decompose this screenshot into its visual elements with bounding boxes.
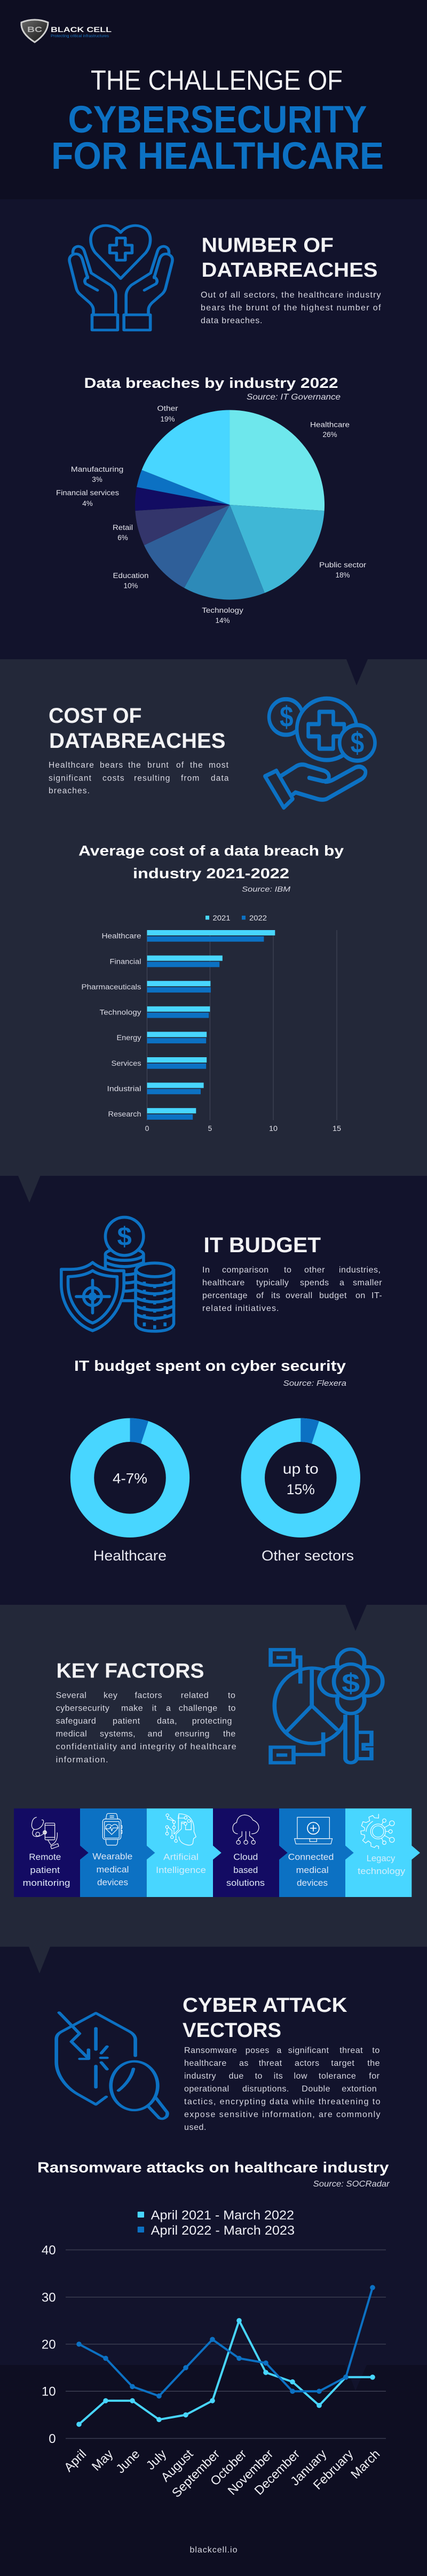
step: wearable medical devices: medical — [96, 1864, 129, 1875]
category labels: Technology — [99, 1009, 141, 1016]
chart title — [84, 375, 341, 402]
category labels: Industrial — [107, 1084, 141, 1093]
axis labels: 15 — [333, 1125, 341, 1133]
logo: Black Cell: BLACK CELL — [51, 25, 112, 34]
icon: shield and coins: $ — [117, 1223, 132, 1252]
legend: April 2021 - March 2022 — [151, 2208, 294, 2222]
chart title: industry 2021-2022 — [133, 865, 289, 881]
legend: 2022 — [249, 914, 267, 922]
text block: information. — [56, 1755, 108, 1765]
title: THE CHALLENGE OF — [91, 65, 343, 96]
heading — [202, 234, 378, 282]
pie labels: Manufacturing — [71, 465, 123, 473]
heading: KEY FACTORS — [57, 1659, 204, 1683]
y axis labels: 30 — [42, 2291, 56, 2305]
category labels: Research — [108, 1110, 141, 1118]
month labels: June — [113, 2447, 143, 2476]
text block: tactics, encrypting data while threatening to — [184, 2097, 381, 2106]
text block: the — [128, 761, 141, 770]
text block: the — [190, 761, 203, 770]
text block: its — [271, 1291, 281, 1300]
heading: COST OF — [49, 704, 142, 728]
pie labels: 3% — [92, 475, 102, 483]
text block: low — [294, 2072, 307, 2081]
text block: due — [229, 2072, 244, 2081]
step: cloud based solutions: solutions — [226, 1878, 265, 1888]
bar chart — [81, 914, 341, 1133]
step: remote patient monitoring: monitoring — [22, 1878, 70, 1888]
month labels: August — [158, 2447, 196, 2484]
process strip: key factors — [14, 1808, 420, 1897]
axis labels: 0 — [145, 1125, 149, 1133]
text block: medical — [56, 1730, 87, 1739]
icon: broken shield with magnifier — [57, 2012, 168, 2119]
text block: data breaches. — [201, 316, 263, 325]
icon: hand holding money and medical cross — [265, 699, 375, 808]
month labels — [61, 2447, 383, 2500]
legend — [205, 914, 267, 922]
step: artificial intelligence: Artificial — [163, 1852, 199, 1862]
text block: budget — [319, 1291, 347, 1300]
month labels: March — [348, 2447, 383, 2481]
text block: spends — [300, 1278, 329, 1287]
month labels: January — [288, 2447, 329, 2488]
step: wearable medical devices — [80, 1808, 155, 1897]
text block: poses — [246, 2046, 270, 2055]
pie labels: 6% — [117, 534, 128, 542]
chart title: Average cost of a data breach by — [78, 843, 344, 859]
panel: cost of data breaches — [0, 659, 427, 1176]
text block: Ransomware — [184, 2046, 237, 2055]
arrow notch — [29, 1947, 50, 1973]
text block: cybersecurity — [56, 1704, 109, 1713]
month labels: September — [169, 2447, 223, 2500]
arrow notch — [345, 2365, 367, 2391]
text block: and — [147, 1730, 163, 1739]
text block: extortion — [342, 2085, 377, 2094]
chart title: Source: Flexera — [283, 1379, 346, 1388]
pie labels: Retail — [113, 524, 133, 532]
y axis labels: 20 — [42, 2338, 56, 2352]
text block: challenge — [179, 1704, 218, 1713]
text block: as — [239, 2059, 249, 2068]
heading: NUMBER OF — [202, 234, 334, 256]
text block: factors — [135, 1691, 162, 1700]
text block — [49, 761, 230, 795]
step: artificial intelligence: Intelligence — [156, 1865, 206, 1875]
heading — [49, 704, 225, 753]
logo: Black Cell — [21, 20, 112, 42]
pie labels: Public sector — [319, 561, 367, 569]
chart title: Data breaches by industry 2022 — [84, 375, 338, 391]
y axis labels: 40 — [42, 2243, 56, 2258]
chart title: Source: IT Governance — [247, 393, 341, 402]
text block: for — [369, 2072, 380, 2081]
logo: Black Cell: BC — [27, 25, 42, 34]
text block: to — [228, 1704, 236, 1713]
text block: a — [166, 1704, 171, 1713]
chart title: Source: SOCRadar — [313, 2180, 390, 2189]
chart title: IT budget spent on cyber security — [74, 1357, 346, 1374]
text block: data, — [157, 1717, 177, 1726]
donut: healthcare: Healthcare — [93, 1548, 167, 1564]
text block: protecting — [192, 1717, 232, 1726]
text block: make — [121, 1704, 143, 1713]
bars 2021 — [147, 930, 275, 1113]
bars 2022 — [147, 936, 264, 1120]
chart title — [78, 843, 344, 893]
text block: brunt — [147, 761, 169, 770]
footer url: blackcell.io — [190, 2546, 238, 2555]
series: April 2021 - March 2022 — [76, 2318, 375, 2427]
heading: DATABREACHES — [49, 729, 225, 753]
text block: industries, — [339, 1266, 381, 1275]
text block: breaches. — [49, 786, 90, 795]
text block: on — [355, 1291, 366, 1300]
text block: Out of all sectors, the healthcare industry — [201, 291, 381, 300]
donut: other sectors: Other sectors — [262, 1548, 354, 1564]
title — [51, 65, 384, 177]
text block: a — [339, 1278, 344, 1287]
text block: tolerance — [319, 2072, 356, 2081]
text block: related — [181, 1691, 209, 1700]
step: remote patient monitoring — [14, 1808, 89, 1897]
text block: comparison — [222, 1266, 269, 1275]
series: April 2022 - March 2023 — [76, 2285, 375, 2399]
pie labels: Healthcare — [310, 421, 350, 428]
text block: IT- — [371, 1291, 382, 1300]
panel: number of data breaches — [0, 199, 427, 659]
category labels: Energy — [116, 1034, 141, 1042]
text block: from — [181, 774, 200, 783]
y axis labels: 0 — [49, 2432, 56, 2446]
legend: 2021 — [212, 914, 231, 922]
y axis labels — [42, 2243, 56, 2446]
text block: threat — [259, 2059, 282, 2068]
step: artificial intelligence — [147, 1808, 222, 1897]
step: cloud based solutions: based — [233, 1865, 258, 1875]
month labels: February — [311, 2447, 356, 2492]
title: CYBERSECURITY — [68, 99, 367, 141]
month labels: April — [61, 2447, 89, 2474]
category labels: Healthcare — [101, 932, 141, 940]
step: cloud based solutions — [213, 1808, 288, 1897]
step: legacy technology: technology — [358, 1866, 406, 1876]
pie labels: 4% — [82, 499, 93, 508]
text block: healthcare — [184, 2059, 227, 2068]
text block: to — [255, 2072, 263, 2081]
text block: confidentiality and integrity of healthcare — [56, 1743, 236, 1752]
text block: expose sensitive information, are commonly — [184, 2110, 381, 2119]
arrow notch — [18, 1176, 41, 1203]
arrow notch — [345, 1605, 367, 1631]
text block: target — [331, 2059, 354, 2068]
text block: significant — [288, 2046, 329, 2055]
text block: the — [223, 1730, 236, 1739]
text block: of — [176, 761, 184, 770]
heading: DATABREACHES — [202, 259, 378, 282]
step: wearable medical devices: Wearable — [92, 1852, 132, 1862]
text block: actors — [295, 2059, 320, 2068]
text block: In — [202, 1266, 210, 1275]
step: connected medical devices: medical — [296, 1865, 329, 1875]
category labels: Services — [111, 1059, 141, 1067]
text block — [184, 2046, 381, 2132]
step: wearable medical devices: devices — [97, 1877, 128, 1887]
donut: healthcare: 4-7% — [113, 1470, 147, 1486]
text block: a — [276, 2046, 282, 2055]
pie labels: 14% — [215, 616, 230, 625]
text block: healthcare — [202, 1278, 245, 1287]
month labels: December — [251, 2447, 303, 2497]
pie chart — [56, 404, 367, 625]
chart title: Ransomware attacks on healthcare industry — [37, 2159, 389, 2175]
y axis labels: 10 — [42, 2385, 56, 2399]
text block — [201, 291, 381, 325]
text block: of — [256, 1291, 264, 1300]
pie labels: Technology — [202, 606, 243, 614]
text block — [56, 1691, 236, 1765]
legend — [138, 2208, 295, 2238]
text block: bears — [100, 761, 123, 770]
month labels: November — [225, 2447, 276, 2497]
icon: key and pie chart — [271, 1649, 383, 1763]
donut: other sectors: 15% — [287, 1481, 315, 1497]
axis labels: 5 — [208, 1125, 212, 1133]
logo: Black Cell: Protecting critical infrastructures — [51, 33, 109, 38]
month labels: May — [89, 2447, 116, 2473]
arrow notch — [346, 659, 368, 685]
icon: shield and coins — [61, 1217, 174, 1331]
pie labels — [56, 404, 367, 625]
panel: key factors — [0, 1605, 427, 1947]
text block: threat — [339, 2046, 363, 2055]
pie labels: 18% — [335, 571, 350, 579]
chart title — [74, 1357, 346, 1388]
text block: systems, — [100, 1730, 136, 1739]
month labels: July — [144, 2447, 169, 2472]
text block — [202, 1266, 382, 1313]
step: connected medical devices — [279, 1808, 354, 1897]
category labels: Financial — [110, 957, 141, 965]
step: connected medical devices: devices — [297, 1878, 328, 1888]
text block: costs — [102, 774, 125, 783]
chart title — [37, 2159, 390, 2189]
step: remote patient monitoring: Remote — [29, 1852, 61, 1862]
pie labels: 26% — [322, 431, 337, 439]
legend: April 2022 - March 2023 — [151, 2223, 295, 2238]
icon: hands holding heart — [69, 225, 172, 330]
text block: data — [211, 774, 230, 783]
step: connected medical devices: Connected — [288, 1852, 334, 1862]
step: legacy technology — [345, 1808, 420, 1897]
text block: the — [367, 2059, 380, 2068]
panel: header — [0, 0, 427, 199]
category labels — [81, 932, 141, 1118]
donut: other sectors — [253, 1430, 354, 1564]
text block: Several — [56, 1691, 86, 1700]
text block: it — [152, 1704, 157, 1713]
text block: to — [228, 1691, 235, 1700]
axis labels — [145, 1125, 341, 1133]
line chart — [42, 2208, 386, 2500]
category labels: Pharmaceuticals — [81, 983, 141, 991]
donut: healthcare — [82, 1430, 178, 1564]
donut: other sectors: up to — [283, 1461, 319, 1477]
text block: resulting — [134, 774, 171, 783]
title: FOR HEALTHCARE — [51, 135, 384, 177]
text block: smaller — [353, 1278, 382, 1287]
pie labels: Other — [157, 404, 178, 412]
text block: safeguard — [56, 1717, 96, 1726]
pie labels: Financial services — [56, 489, 119, 497]
text block: ensuring — [175, 1730, 210, 1739]
heading: IT BUDGET — [204, 1234, 321, 1257]
text block: overall — [286, 1291, 313, 1300]
chart title: Source: IBM — [242, 885, 290, 893]
icon: hand holding money and medical cross: $ — [280, 700, 294, 733]
pie labels: 10% — [123, 582, 138, 590]
text block: patient — [113, 1717, 140, 1726]
step: legacy technology: Legacy — [367, 1853, 396, 1863]
text block: related initiatives. — [202, 1304, 279, 1313]
text block: bears the brunt of the highest number of — [201, 303, 381, 313]
text block: key — [104, 1691, 117, 1700]
text block: to — [284, 1266, 291, 1275]
month labels: October — [208, 2447, 249, 2488]
heading: CYBER ATTACK — [183, 1994, 347, 2017]
step: cloud based solutions: Cloud — [233, 1852, 258, 1862]
text block: used. — [184, 2123, 207, 2132]
heading: VECTORS — [183, 2019, 281, 2042]
icon: hand holding money and medical cross: $ — [351, 726, 364, 759]
panel: cyber attack vectors — [0, 1947, 427, 2365]
step: remote patient monitoring: patient — [30, 1865, 60, 1875]
text block: Healthcare — [49, 761, 94, 770]
text block: most — [209, 761, 229, 770]
text block: percentage — [202, 1291, 248, 1300]
text block: to — [372, 2046, 380, 2055]
panel: IT budget — [0, 1176, 427, 1605]
text block: disruptions. — [242, 2085, 289, 2094]
panel: footer band — [0, 2365, 427, 2576]
icon: key and pie chart: $ — [342, 1668, 360, 1698]
text block: industry — [184, 2072, 216, 2081]
text block: operational — [184, 2085, 230, 2094]
text block: other — [304, 1266, 325, 1275]
text block: Double — [302, 2085, 330, 2094]
text block: its — [274, 2072, 283, 2081]
pie labels: 19% — [160, 415, 175, 423]
text block: significant — [49, 774, 92, 783]
pie labels: Education — [113, 572, 148, 580]
text block: typically — [256, 1278, 289, 1287]
axis labels: 10 — [269, 1125, 278, 1133]
heading — [183, 1994, 347, 2042]
